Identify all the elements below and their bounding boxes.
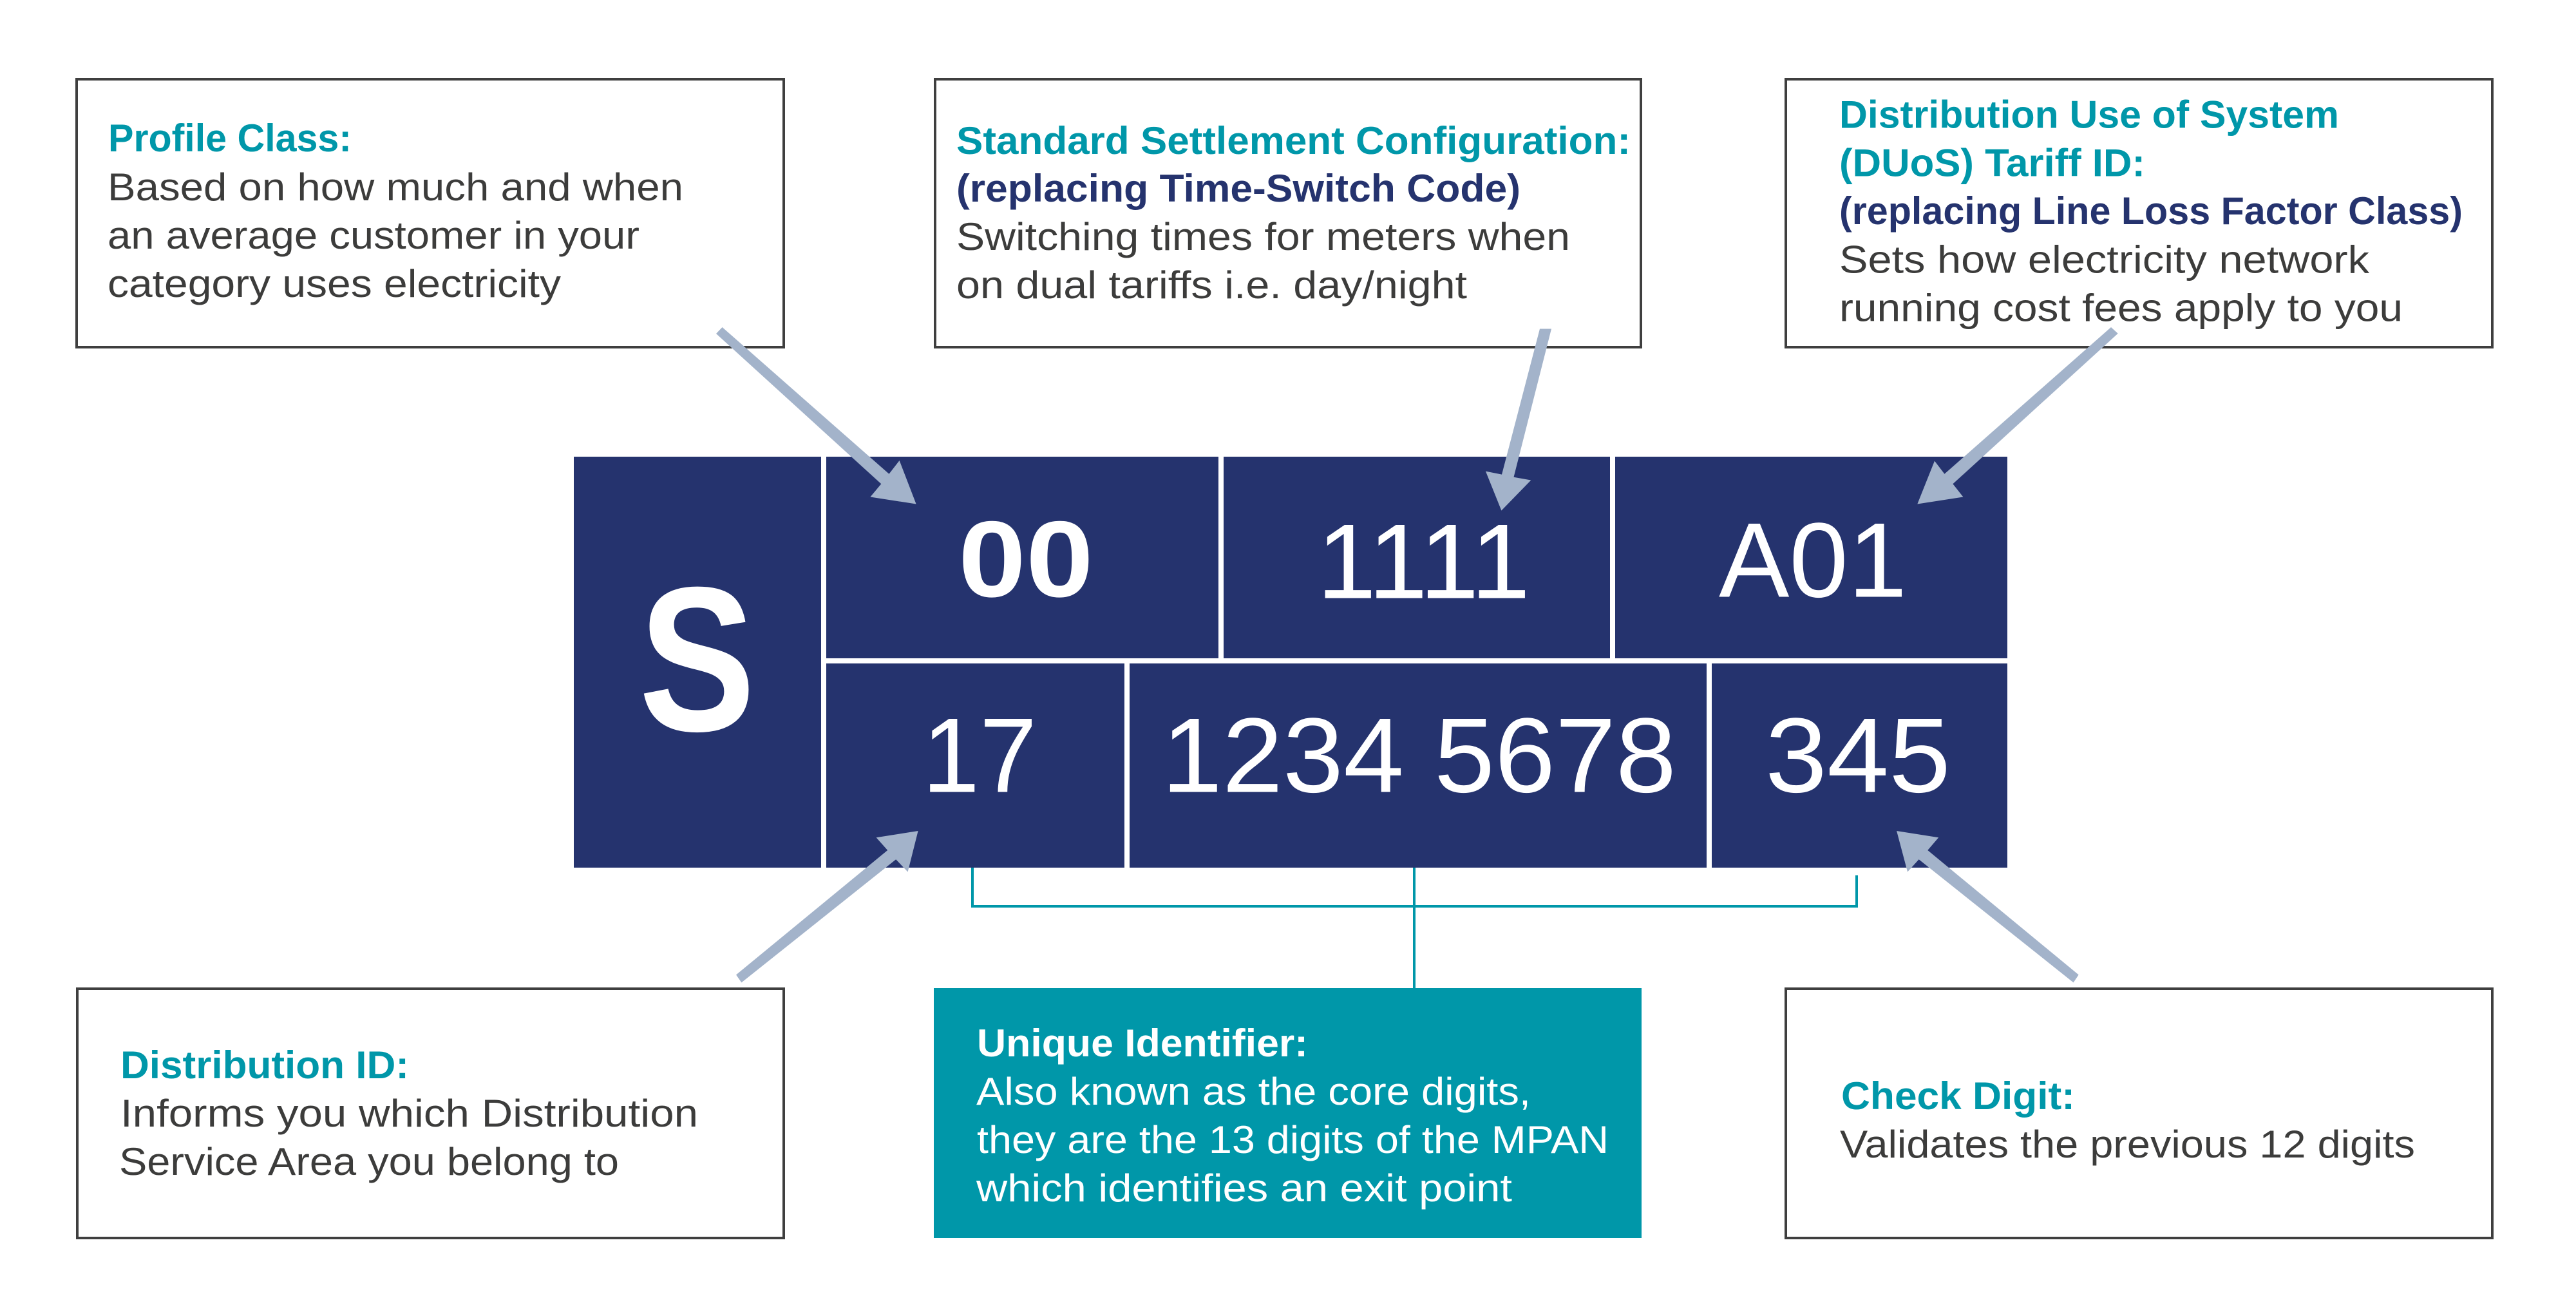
text: Standard Settlement Configuration description xyxy=(956,215,1570,307)
heading: Check Digit: Check Digit: xyxy=(1841,1074,2075,1118)
cell: 345 xyxy=(1712,663,2007,868)
arrow: DUoS Tariff ID to A01 xyxy=(1917,327,2118,504)
text: Distribution ID description: Service Area you belong to xyxy=(119,1140,619,1183)
cell: 1111: 1111 xyxy=(1317,502,1530,621)
heading: Distribution Use of System Tariff ID: (DUoS) Tariff ID: xyxy=(1839,142,2145,184)
text: Unique Identifier description: which identifies an exit point xyxy=(976,1167,1512,1210)
cell: A01 xyxy=(1615,457,2007,658)
text: Unique Identifier description xyxy=(976,1070,1609,1210)
cell: 17 xyxy=(826,663,1124,868)
cell: 1111 xyxy=(1224,457,1610,658)
heading: Distribution ID: Distribution ID: xyxy=(120,1043,409,1087)
cell: 00: 00 xyxy=(958,499,1094,620)
text: Unique Identifier description: they are the 13 digits of the MPAN xyxy=(977,1118,1609,1161)
panel: Standard Settlement Configuration xyxy=(935,79,1641,347)
text: Profile Class description: Based on how much and when xyxy=(108,166,683,209)
panel: Distribution Use of System Tariff ID xyxy=(1786,79,2492,347)
arrow: Profile Class to 00 xyxy=(716,327,916,504)
text: Check Digit description: Validates the previous 12 digits xyxy=(1840,1123,2415,1166)
cell: A01: A01 xyxy=(1719,501,1907,620)
heading: Standard Settlement Configuration: Standard Settlement Configuration: xyxy=(956,119,1631,162)
panel: Check Digit xyxy=(1786,989,2492,1238)
panel: Unique Identifier xyxy=(934,988,1642,1238)
text: Standard Settlement Configuration description: on dual tariffs i.e. day/night xyxy=(956,263,1467,307)
text: Profile Class description: category uses electricity xyxy=(108,262,561,305)
subheading: replacing Time-Switch Code: (replacing Time-Switch Code) xyxy=(956,167,1520,210)
cell: 345: 345 xyxy=(1765,696,1951,814)
subheading: replacing Line Loss Factor Class: (replacing Line Loss Factor Class) xyxy=(1839,189,2463,233)
heading: Distribution Use of System Tariff ID: Distribution Use of System xyxy=(1839,93,2339,137)
cell: 00 xyxy=(826,457,1218,658)
arrow: Standard Settlement Configuration to 1111 xyxy=(1486,329,1551,511)
heading: Distribution Use of System Tariff ID xyxy=(1839,93,2339,184)
text: Profile Class description: an average customer in your xyxy=(108,214,639,257)
arrow: Check Digit to 345 xyxy=(1897,831,2079,982)
text: Unique Identifier description: Also known as the core digits, xyxy=(976,1070,1531,1113)
cell: S: S xyxy=(639,544,755,774)
text: Standard Settlement Configuration description: Switching times for meters when xyxy=(956,215,1570,258)
cell: 1234 5678 xyxy=(1130,663,1707,868)
text: DUoS description: running cost fees apply to you xyxy=(1839,286,2403,330)
heading: Unique Identifier: Unique Identifier: xyxy=(977,1022,1308,1065)
cell: S xyxy=(574,457,821,868)
text: DUoS description xyxy=(1839,238,2403,330)
panel: Profile Class xyxy=(77,79,784,347)
cell: 1234 5678: 1234 5678 xyxy=(1162,696,1676,814)
cell: 17: 17 xyxy=(922,696,1037,814)
text: DUoS description: Sets how electricity network xyxy=(1839,238,2370,281)
text: Distribution ID description xyxy=(119,1092,698,1183)
panel: Distribution ID xyxy=(77,989,784,1238)
text: Distribution ID description: Informs you which Distribution xyxy=(120,1092,698,1135)
heading: Profile Class: Profile Class: xyxy=(108,117,352,160)
connector bracket: Unique Identifier xyxy=(971,863,1858,989)
MPAN number grid xyxy=(574,457,2007,868)
text: Profile Class description xyxy=(108,166,683,305)
arrow: Distribution ID to 17 xyxy=(736,831,918,982)
